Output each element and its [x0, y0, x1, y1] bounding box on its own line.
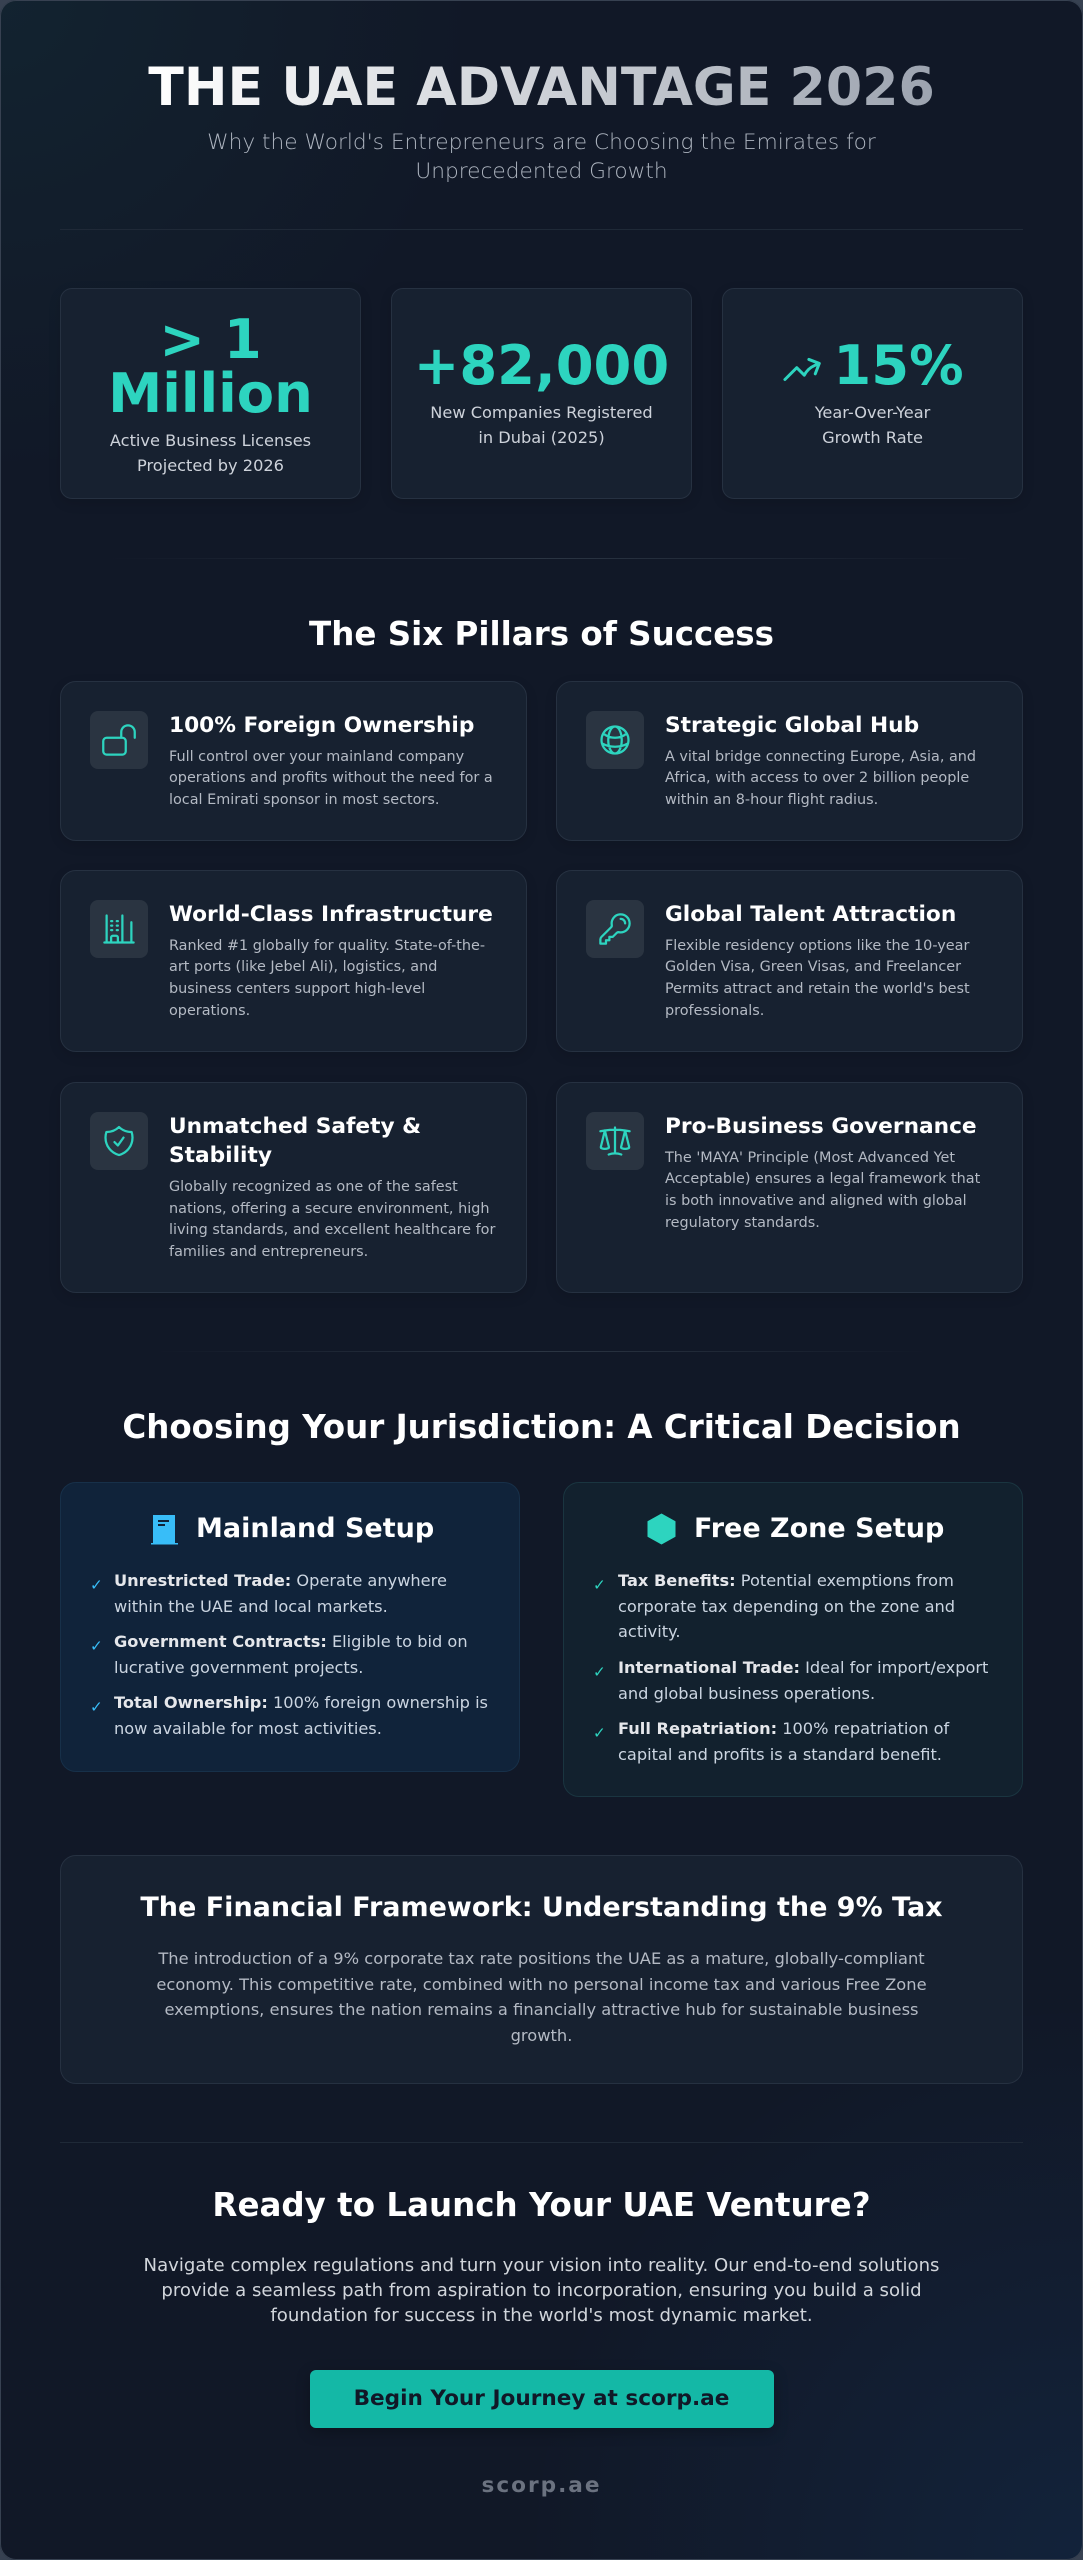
list: capital and profits is a standard benefit.: [618, 1745, 942, 1764]
list: [90, 1571, 488, 1738]
subtitle: Why the World's Entrepreneurs are Choosing the Emirates for: [207, 130, 876, 155]
stat: growth: [722, 288, 1023, 499]
heading: CTA: Ready to Launch Your UAE Venture?: [212, 2186, 871, 2224]
text: families and entrepreneurs.: [169, 1244, 368, 1260]
heading: The Financial Framework: Understanding the 9% Tax: [140, 1892, 943, 1923]
stat: growth: Growth Rate: [822, 428, 923, 447]
heading: jurisdiction: Choosing Your Jurisdiction: A Critical Decision: [122, 1408, 961, 1446]
pillar: talent: [556, 870, 1023, 1052]
list: now available for most activities.: [114, 1719, 382, 1738]
icon: open lock: [90, 711, 148, 769]
list: activity.: [618, 1622, 681, 1641]
subtitle: [207, 130, 876, 184]
text: operations and profits without the need for a: [169, 770, 493, 786]
CTA button: Begin Your Journey at scorp.ae: [354, 2386, 729, 2411]
pillar: ownership: [60, 681, 527, 841]
text: Strategic Global Hub: [665, 713, 919, 738]
list: ✓: [90, 1698, 103, 1716]
text: growth.: [511, 2026, 572, 2045]
text: [169, 902, 493, 1019]
text: is both innovative and aligned with global: [665, 1193, 967, 1209]
text: Global Talent Attraction: [665, 902, 956, 927]
list: ✓: [593, 1663, 606, 1681]
list: ✓: [593, 1576, 606, 1594]
text: Unmatched Safety &: [169, 1114, 421, 1139]
stat: growth: 15%: [833, 334, 964, 397]
icon: key: [586, 900, 644, 958]
list: ✓: [90, 1637, 103, 1655]
text: local Emirati sponsor in most sectors.: [169, 792, 439, 808]
text: [156, 1949, 927, 2045]
list: Government Contracts: Eligible to bid on: [114, 1632, 468, 1651]
CTA button: [310, 2370, 774, 2428]
CTA text: Navigate complex regulations and turn your vision into reality. Our end-to-end solutions: [144, 2254, 939, 2276]
list: ✓: [593, 1724, 606, 1742]
text: [665, 902, 970, 1019]
list: Tax Benefits: Potential exemptions from: [618, 1571, 954, 1590]
text: World-Class Infrastructure: [169, 902, 493, 927]
pillar: governance: [556, 1082, 1023, 1293]
icon: building solid: [151, 1515, 178, 1544]
list: [593, 1571, 988, 1764]
icon: scales: [586, 1112, 644, 1170]
text: within an 8-hour flight radius.: [665, 792, 878, 808]
list: Total Ownership: 100% foreign ownership is: [114, 1693, 488, 1712]
heading: six pillars: The Six Pillars of Success: [309, 615, 774, 653]
text: exemptions, ensures the nation remains a financially attractive hub for sustainable business: [164, 2000, 919, 2019]
title: THE UAE ADVANTAGE 2026: [148, 58, 935, 118]
pillar: safety: [60, 1082, 527, 1293]
icon: globe: [586, 711, 644, 769]
stat: new companies: in Dubai (2025): [478, 428, 605, 447]
text: Flexible residency options like the 10-year: [665, 938, 969, 954]
list: corporate tax depending on the zone and: [618, 1597, 955, 1616]
text: The 'MAYA' Principle (Most Advanced Yet: [665, 1150, 955, 1166]
text: Ranked #1 globally for quality. State-of-the-: [169, 938, 485, 954]
text: [664, 1114, 980, 1231]
icon: buildings: [90, 900, 148, 958]
text: The introduction of a 9% corporate tax rate positions the UAE as a mature, globally-compliant: [158, 1949, 925, 1968]
pillar: infrastructure: [60, 870, 527, 1052]
text: business centers support high-level: [169, 981, 425, 997]
pillar: hub: [556, 681, 1023, 841]
text: art ports (like Jebel Ali), logistics, and: [169, 959, 437, 975]
list: and global business operations.: [618, 1684, 875, 1703]
text: regulatory standards.: [665, 1215, 820, 1231]
text: [169, 713, 493, 808]
text: Golden Visa, Green Visas, and Freelancer: [665, 959, 961, 975]
text: Globally recognized as one of the safest: [169, 1179, 458, 1195]
text: economy. This competitive rate, combined with no personal income tax and various Free Zone: [156, 1975, 927, 1994]
list: lucrative government projects.: [114, 1658, 363, 1677]
text: nations, offering a secure environment, high: [169, 1201, 489, 1217]
text: operations.: [169, 1003, 250, 1019]
list: within the UAE and local markets.: [114, 1597, 388, 1616]
text: Africa, with access to over 2 billion people: [665, 770, 969, 786]
stat: licenses: Million: [108, 362, 313, 425]
stat: new companies: +82,000: [414, 334, 669, 397]
CTA text: provide a seamless path from aspiration to incorporation, ensuring you build a solid: [161, 2280, 922, 2300]
icon: hexagon: [648, 1514, 676, 1544]
text: [665, 713, 976, 808]
text: living standards, and excellent healthcare for: [169, 1222, 495, 1238]
text: Permits attract and retain the world's best: [665, 981, 970, 997]
stat: licenses: Projected by 2026: [137, 456, 284, 475]
title: Mainland Setup: [196, 1513, 434, 1544]
stat: licenses: Active Business Licenses: [110, 431, 311, 450]
stat: licenses: [60, 288, 361, 499]
list: Unrestricted Trade: Operate anywhere: [114, 1571, 447, 1590]
text: Full control over your mainland company: [169, 749, 464, 765]
panel: free zone: [563, 1482, 1023, 1797]
icon: shield: [90, 1112, 148, 1170]
footer brand: scorp.ae: [481, 2473, 602, 2498]
list: Full Repatriation: 100% repatriation of: [618, 1719, 949, 1738]
text: Acceptable) ensures a legal framework that: [665, 1171, 980, 1187]
text: [169, 1114, 496, 1260]
list: International Trade: Ideal for import/export: [618, 1658, 988, 1677]
title: Free Zone Setup: [694, 1513, 944, 1544]
panel: tax framework: [60, 1855, 1023, 2084]
CTA text: foundation for success in the world's most dynamic market.: [270, 2304, 813, 2326]
subtitle: Unprecedented Growth: [415, 159, 668, 184]
list: ✓: [90, 1576, 103, 1594]
stat: new companies: New Companies Registered: [430, 403, 653, 422]
stat: new companies: [391, 288, 692, 499]
text: Stability: [169, 1143, 272, 1168]
CTA text: [144, 2254, 939, 2326]
stat: growth: Year-Over-Year: [815, 403, 930, 422]
text: Pro-Business Governance: [665, 1114, 977, 1139]
text: 100% Foreign Ownership: [169, 713, 474, 738]
panel: mainland: [60, 1482, 520, 1772]
text: A vital bridge connecting Europe, Asia, and: [665, 749, 976, 765]
text: professionals.: [665, 1003, 764, 1019]
stat: licenses: > 1: [159, 308, 262, 371]
